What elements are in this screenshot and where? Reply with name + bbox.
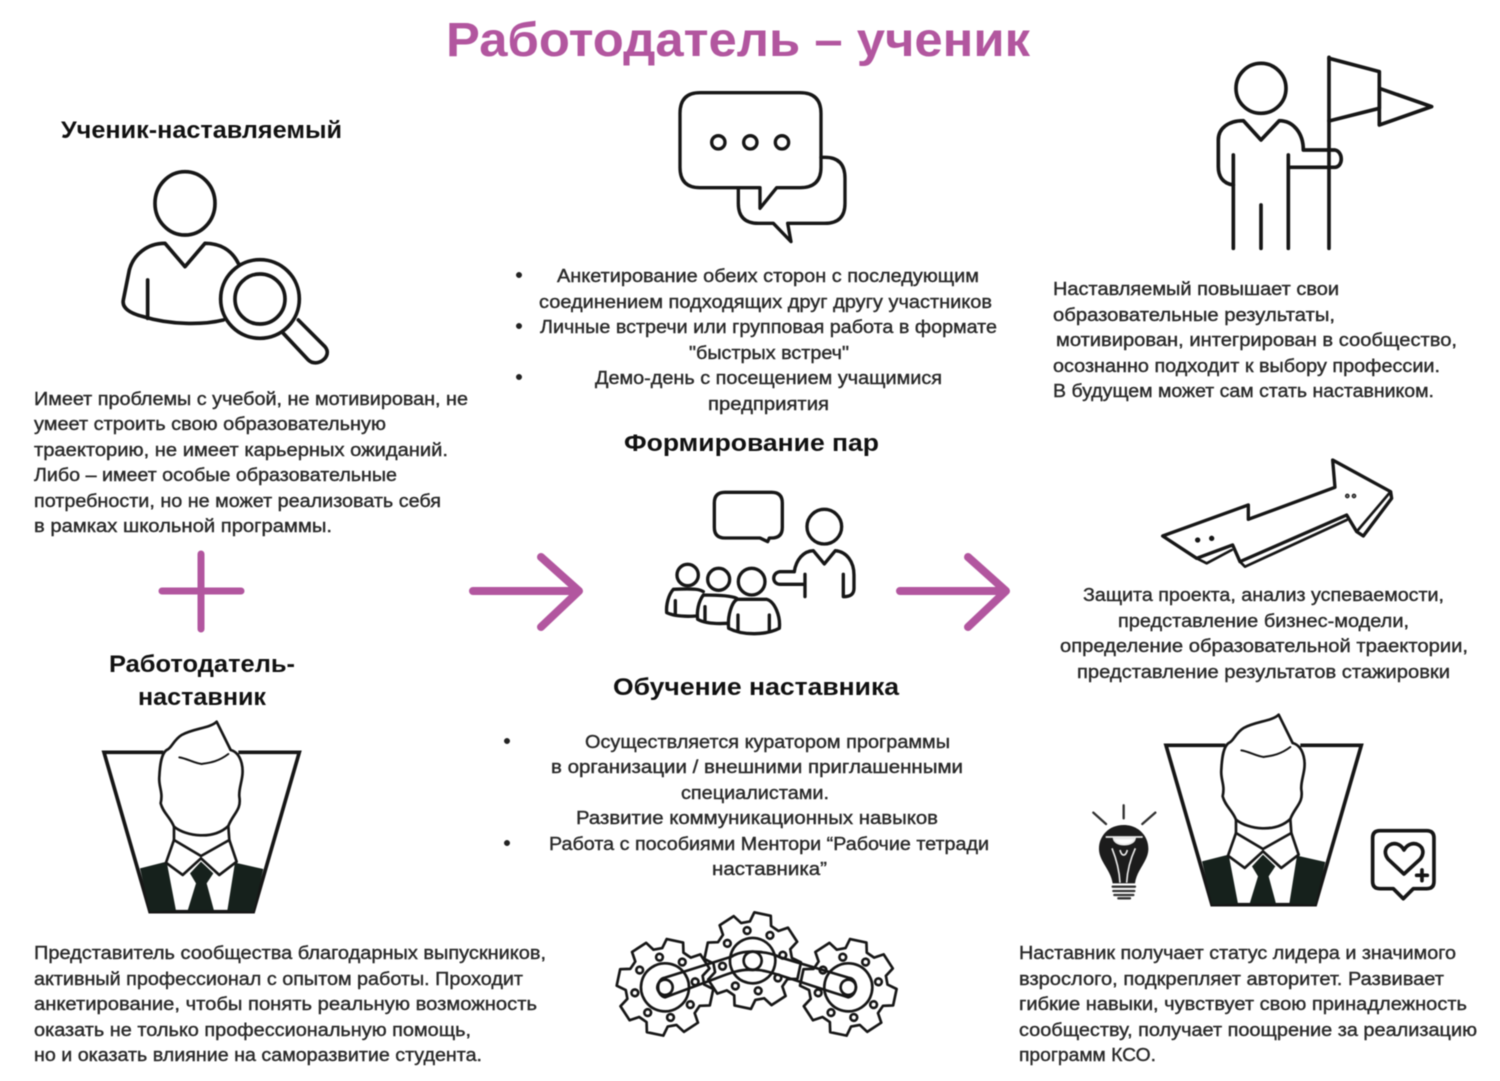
icon: chat bubbles (680, 93, 845, 242)
icon: person with magnifier (123, 172, 327, 363)
arrow: center to right (900, 557, 1006, 627)
text: student description: Имеет проблемы с учебой, не мотивирован, не (34, 388, 468, 409)
text: mentor description: Представитель сообщества благодарных выпускников, (34, 942, 546, 963)
text: mentor results: сообществу, получает поощрение за реализацию (1019, 1019, 1477, 1040)
text: mentee results (1053, 278, 1457, 401)
text: mentor results: Наставник получает статус лидера и значимого (1019, 942, 1456, 963)
panel: mentor results (1019, 715, 1477, 1065)
icon: man in suit (104, 722, 299, 912)
text: mentor training bullets: специалистами. (681, 782, 829, 803)
text: student description: траекторию, не имеет карьерных ожиданий. (34, 439, 448, 460)
icon: three linked gears (609, 904, 905, 1044)
text: mentor description: анкетирование, чтобы понять реальную возможность (34, 993, 537, 1014)
text: pair formation bullets: Демо-день с посещением учащимися (595, 367, 942, 388)
text: mentee results: Наставляемый повышает свои (1053, 278, 1339, 299)
text: mentor training bullets (504, 731, 989, 879)
panel: mentee results (1053, 57, 1468, 682)
text: pair formation bullets (516, 265, 997, 414)
title: Работодатель – ученик (446, 14, 1031, 67)
text: mentor description: активный профессионал с опытом работы. Проходит (34, 968, 524, 989)
text: mentor results: взрослого, подкрепляет авторитет. Развивает (1019, 968, 1445, 989)
heading: employer mentor: наставник (138, 684, 267, 711)
text: student description: потребности, но не может реализовать себя (34, 490, 441, 511)
text: mentor training bullets: Работа с пособиями Ментори “Рабочие тетради (549, 833, 989, 854)
icon: light bulb with graduation cap (1093, 805, 1155, 898)
icon: leader in suit (1166, 715, 1361, 905)
text: mentor training bullets: наставника” (712, 858, 827, 879)
text: pair formation bullets: "быстрых встреч" (689, 342, 849, 363)
text: student description: умеет строить свою образовательную (34, 413, 386, 434)
text: project defense: Защита проекта, анализ успеваемости, (1083, 584, 1444, 605)
text: mentor description: оказать не только профессиональную помощь, (34, 1019, 471, 1040)
heading: employer mentor (109, 651, 295, 711)
text: mentor results: программ КСО. (1019, 1044, 1156, 1065)
text: mentor results: гибкие навыки, чувствует свою принадлежность (1019, 993, 1467, 1014)
text: pair formation bullets: Личные встречи или групповая работа в формате (540, 316, 997, 337)
heading: student mentee: Ученик-наставляемый (61, 117, 342, 144)
icon: group with speaker (667, 492, 854, 634)
text: student description: Либо – имеет особые образовательные (34, 464, 397, 485)
panel: pair formation (504, 93, 997, 1044)
text: project defense: представление бизнес-модели, (1118, 610, 1409, 631)
text: mentee results: мотивирован, интегрирован в сообщество, (1056, 329, 1457, 350)
text: mentee results: образовательные результаты, (1053, 304, 1335, 325)
text: mentor training bullets: Развитие коммуникационных навыков (576, 807, 938, 828)
icon: plus sign (162, 554, 241, 629)
text: mentor training bullets: Осуществляется куратором программы (585, 731, 950, 752)
text: mentee results: В будущем может сам стать наставником. (1053, 380, 1434, 401)
text: mentor results (1019, 942, 1477, 1065)
heading: mentor training: Обучение наставника (613, 674, 900, 701)
text: project defense (1060, 584, 1468, 682)
text: pair formation bullets: Анкетирование обеих сторон с последующим (557, 265, 979, 286)
text: pair formation bullets: предприятия (708, 393, 829, 414)
heading: pair formation: Формирование пар (624, 430, 879, 457)
icon: heart card with plus (1373, 831, 1434, 899)
text: pair formation bullets: соединением подходящих друг другу участников (539, 291, 992, 312)
text: mentor description (34, 942, 546, 1065)
panel: employer mentor (34, 651, 546, 1065)
text: project defense: определение образовательной траектории, (1060, 635, 1468, 656)
text: mentor training bullets: в организации / внешними приглашенными (551, 756, 963, 777)
text: student description: в рамках школьной программы. (34, 515, 332, 536)
icon: zigzag arrow (1163, 460, 1392, 567)
heading: employer mentor: Работодатель- (109, 651, 295, 678)
text: project defense: представление результатов стажировки (1077, 661, 1450, 682)
icon: person with flag (1218, 57, 1432, 248)
arrow: left to center (473, 557, 579, 627)
text: mentor description: но и оказать влияние на саморазвитие студента. (34, 1044, 482, 1065)
text: mentee results: осознанно подходит к выбору профессии. (1053, 355, 1440, 376)
panel: student mentee (34, 117, 468, 536)
text: student description (34, 388, 468, 536)
